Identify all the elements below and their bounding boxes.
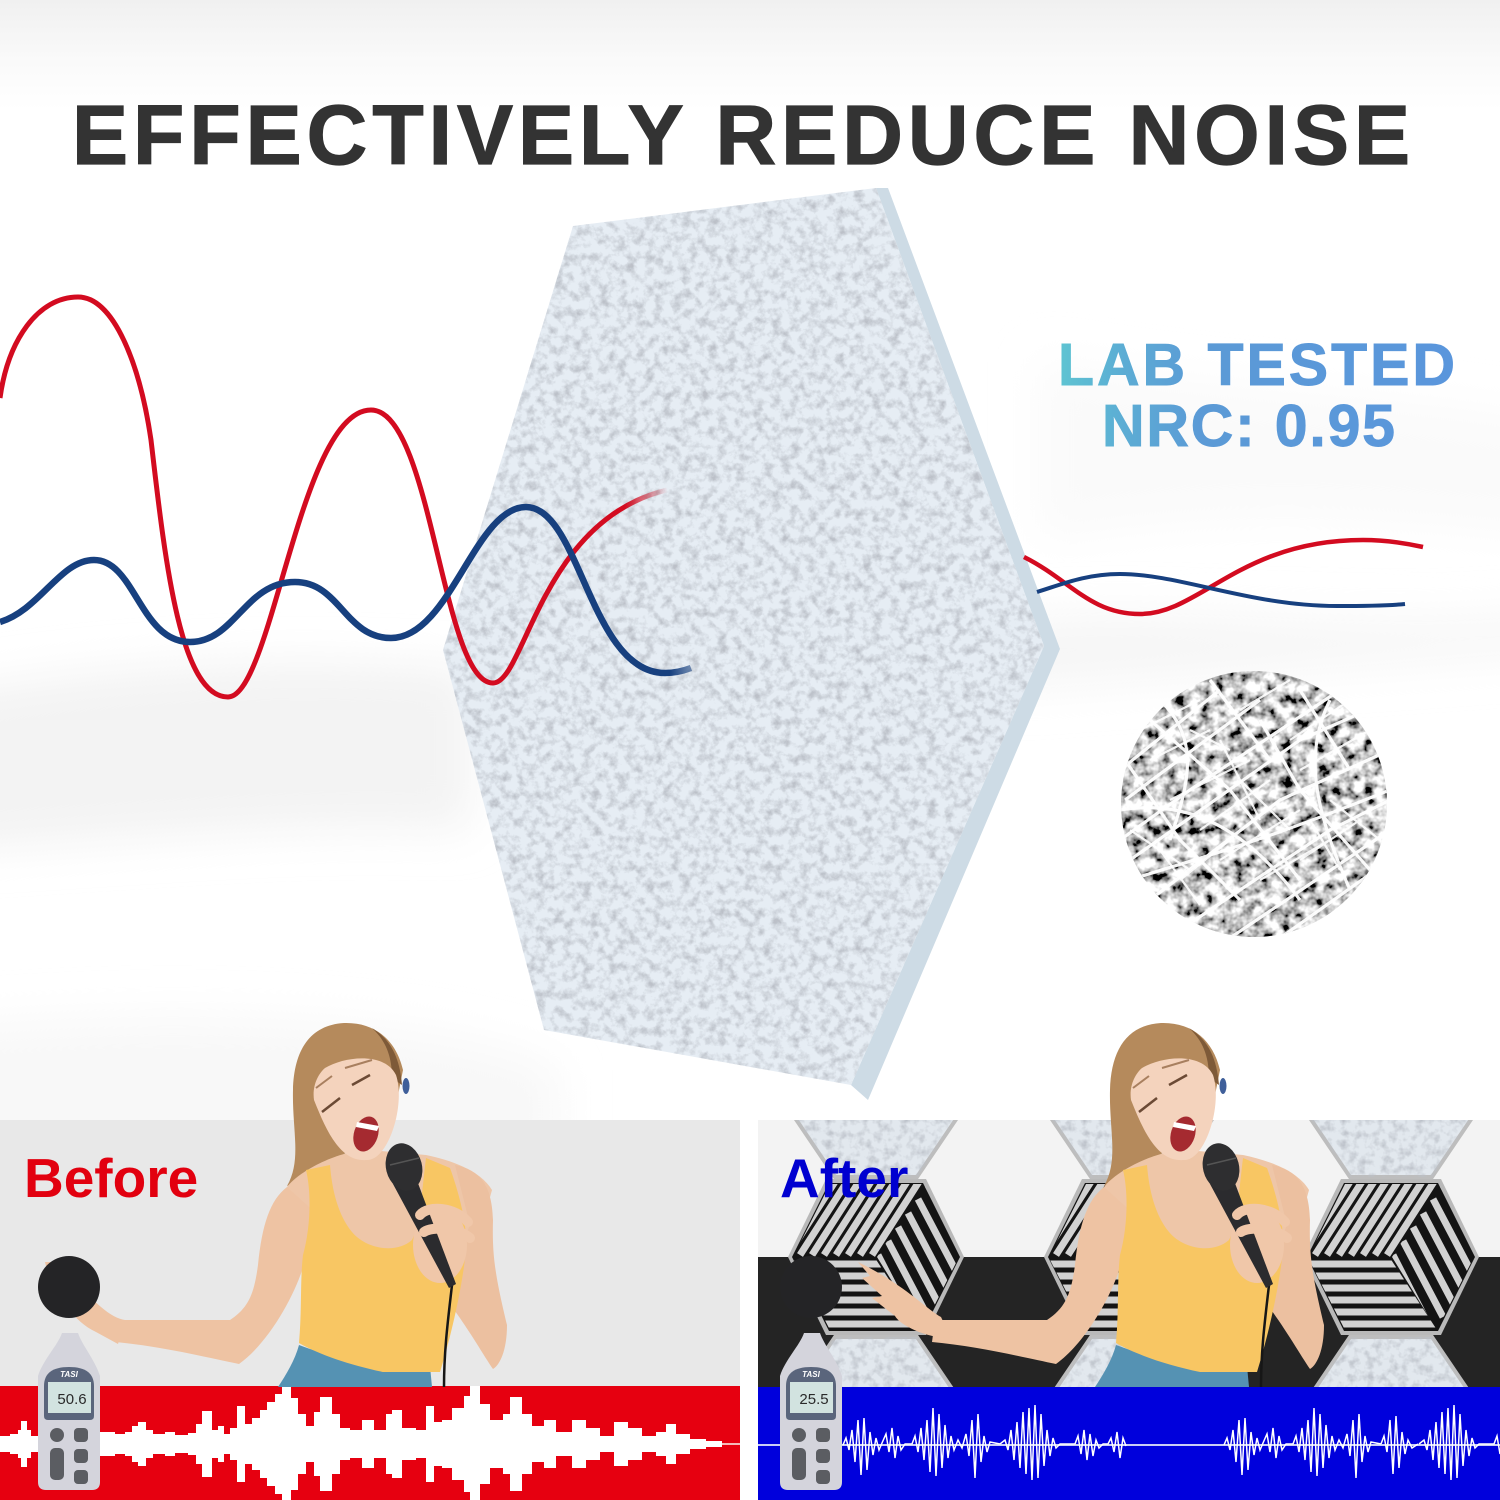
before label: Before bbox=[24, 1147, 198, 1209]
reduced sound wave: blue bbox=[1037, 574, 1405, 606]
sound level meter before bbox=[38, 1256, 100, 1490]
incoming sound wave: blue bbox=[0, 507, 691, 673]
after waveform bbox=[758, 1405, 1500, 1480]
fibre texture close-up bbox=[1120, 670, 1390, 938]
title: EFFECTIVELY REDUCE NOISE bbox=[72, 88, 1410, 182]
sound level meter after bbox=[780, 1256, 842, 1490]
sound level meter after: 25.5 bbox=[799, 1391, 829, 1408]
striped hexagons bbox=[776, 1177, 1481, 1341]
hexagon acoustic panel bbox=[440, 185, 1060, 1100]
panel front face bbox=[443, 188, 1044, 1085]
sound level meter after: TASI bbox=[802, 1370, 821, 1379]
sound level meter before: 50.6 bbox=[57, 1391, 87, 1408]
nrc value: NRC: 0.95 bbox=[1102, 393, 1395, 459]
singer after bbox=[932, 1023, 1324, 1387]
panel: before bbox=[0, 1023, 740, 1500]
panel: after bbox=[758, 1023, 1500, 1500]
singer before bbox=[115, 1023, 507, 1387]
felt hexagons bbox=[791, 1112, 1476, 1402]
hand holding meter bbox=[45, 1262, 125, 1344]
felt mottling bbox=[440, 185, 1050, 1090]
incoming sound wave: red bbox=[0, 297, 667, 697]
lab tested text: LAB TESTED bbox=[1058, 332, 1455, 398]
panel edge thickness bbox=[851, 188, 1060, 1100]
after background wall bbox=[758, 1112, 1500, 1402]
before waveform bbox=[0, 1386, 740, 1500]
before background bbox=[0, 1120, 740, 1387]
sound level meter before: TASI bbox=[60, 1370, 79, 1379]
after blue band bbox=[758, 1387, 1500, 1500]
lab tested callout bbox=[1058, 332, 1455, 459]
reduced sound wave: red bbox=[1024, 540, 1423, 614]
after label: After bbox=[780, 1147, 908, 1209]
before red band bbox=[0, 1386, 740, 1500]
raised open hand bbox=[858, 1262, 951, 1338]
